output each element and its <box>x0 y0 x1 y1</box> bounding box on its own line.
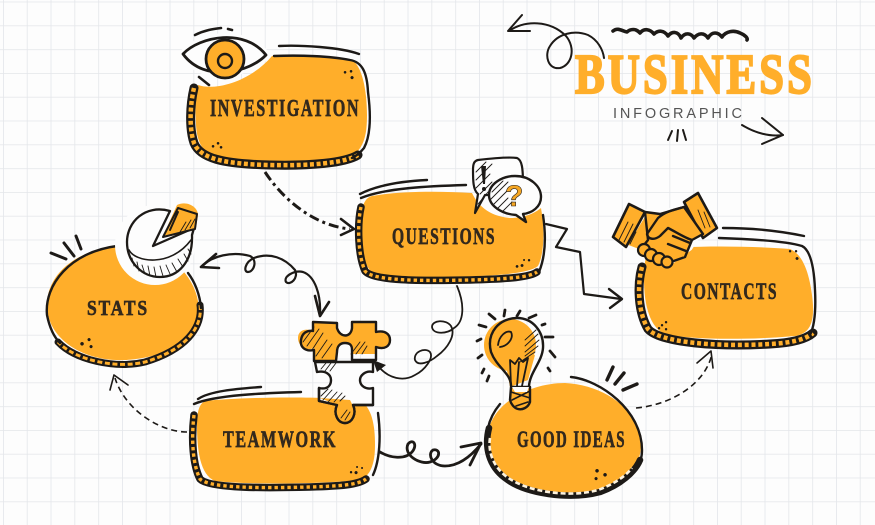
card hatched edge <box>487 428 640 496</box>
card outline <box>194 387 380 475</box>
icon: handshake <box>613 193 717 268</box>
panel: teamwork <box>193 387 380 488</box>
card outline <box>274 46 370 158</box>
title word: business: BUSINESS <box>575 44 815 106</box>
card outline <box>488 377 642 466</box>
upper puzzle piece <box>298 322 390 361</box>
clasped hands <box>640 207 703 263</box>
card outline <box>360 180 545 272</box>
card hatched edge <box>58 305 200 364</box>
small arrow right of subtitle <box>742 118 783 144</box>
decorative squiggle above title <box>613 29 747 40</box>
arrow: stats to puzzle <box>201 254 329 316</box>
card dots <box>80 338 93 348</box>
stats card edge beside pie <box>188 273 201 308</box>
icon: speech bubbles <box>473 158 541 222</box>
left cuff <box>613 204 645 247</box>
icon: light bulb <box>477 310 555 409</box>
card hatched edge <box>191 88 358 165</box>
arrow: teamwork to good ideas <box>380 442 481 466</box>
back bubble <box>473 158 523 213</box>
card hatched edge <box>639 267 813 345</box>
card hatched edge <box>193 415 366 488</box>
panel: questions <box>359 180 545 280</box>
icon: puzzle <box>298 322 390 423</box>
panel: good ideas <box>487 367 642 496</box>
question mark: ? <box>505 180 523 213</box>
card outline <box>47 246 117 343</box>
bulb rays <box>477 310 555 381</box>
card dots <box>212 70 354 149</box>
card dots <box>594 469 607 480</box>
right cuff <box>684 193 717 238</box>
panel: contacts <box>639 228 815 345</box>
label: stats: STATS <box>87 296 149 320</box>
small rays under title <box>668 130 686 141</box>
card dots <box>658 250 799 330</box>
icon: eye <box>183 28 266 85</box>
arrow: questions to puzzle <box>373 286 462 379</box>
pie body <box>127 209 194 277</box>
label: contacts: CONTACTS <box>681 279 778 305</box>
card outline <box>719 228 815 335</box>
pie slice <box>163 203 198 236</box>
lower puzzle piece <box>315 362 373 423</box>
arrow: teamwork to stats <box>110 375 187 432</box>
arrow: investigation to questions <box>265 172 354 235</box>
card hatched edge <box>359 207 537 280</box>
card dots <box>350 466 363 474</box>
card dots <box>516 259 530 268</box>
panel: stats <box>47 236 200 364</box>
card fill <box>362 192 543 277</box>
card fill <box>195 56 367 162</box>
label: teamwork: TEAMWORK <box>223 427 337 452</box>
rays <box>607 367 637 390</box>
title <box>575 44 815 122</box>
label: investigation: INVESTIGATION <box>210 96 360 122</box>
icon: pie chart <box>115 203 201 308</box>
card fill <box>487 383 641 494</box>
arrow: questions to contacts <box>546 224 622 308</box>
curly arrow top left of title <box>508 15 604 68</box>
bulb base <box>510 387 530 409</box>
rays <box>51 236 81 259</box>
arrow: good ideas to contacts <box>636 351 713 408</box>
card fill <box>644 246 813 339</box>
card fill <box>197 397 375 484</box>
label: good ideas: GOOD IDEAS <box>517 427 626 452</box>
card fill <box>47 246 199 360</box>
panel: investigation <box>191 46 370 165</box>
front bubble <box>489 176 541 222</box>
label: questions: QUESTIONS <box>392 224 496 249</box>
subtitle: infographic: INFOGRAPHIC <box>613 106 742 122</box>
